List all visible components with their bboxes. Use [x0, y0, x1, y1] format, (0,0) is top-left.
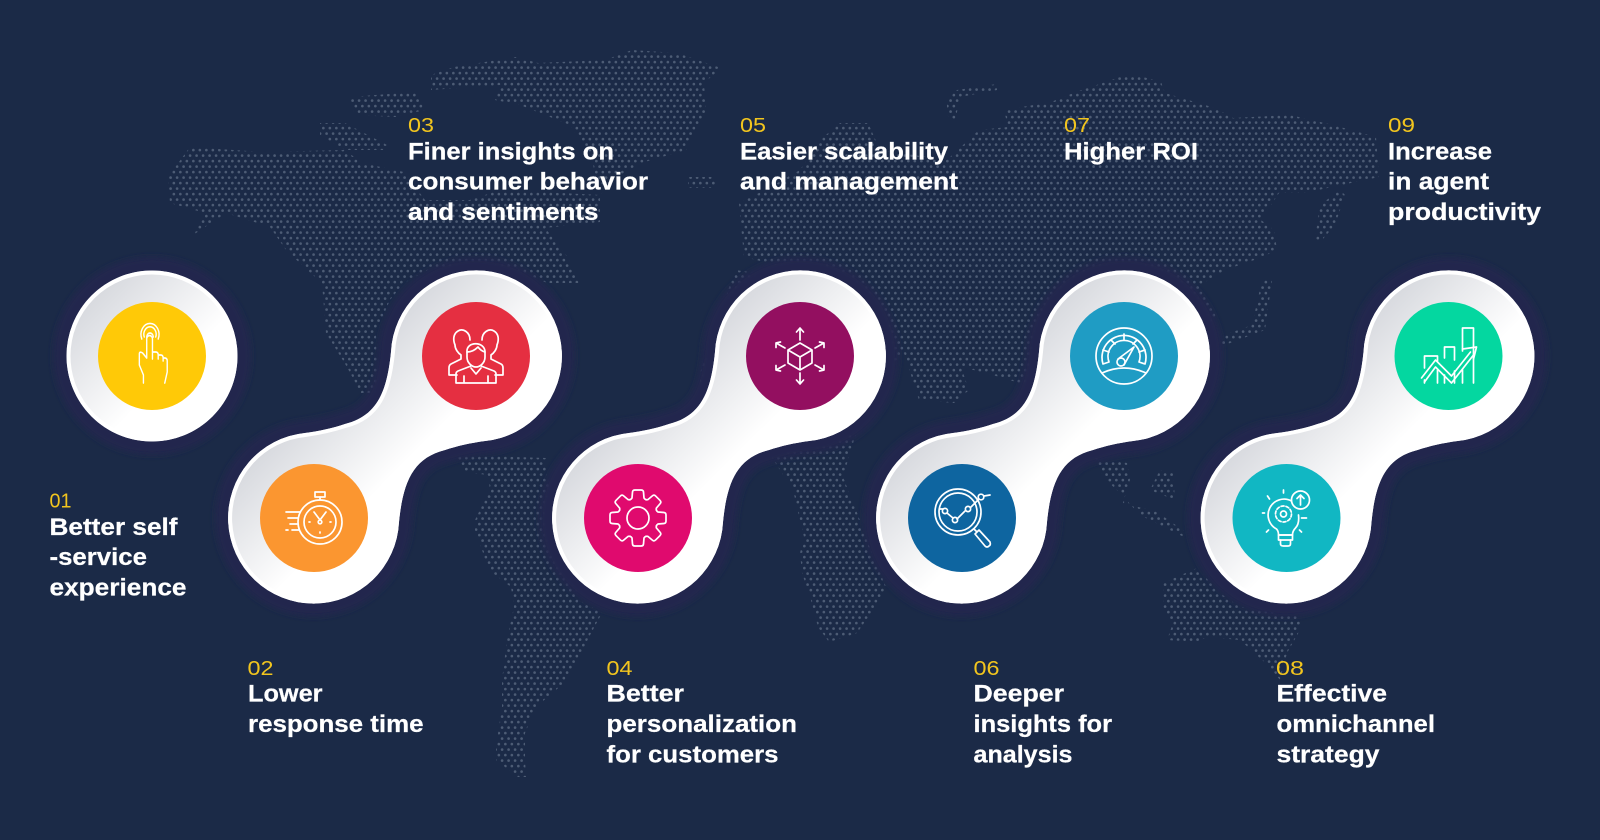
step 9 label: Increase [1388, 138, 1492, 166]
step 8 label [1276, 657, 1435, 768]
step 7 label [1064, 114, 1198, 166]
step 7 label: 07 [1064, 114, 1090, 137]
step 2 label [248, 657, 424, 738]
step 4 label: for customers [606, 742, 778, 768]
step 1 label: 01 [50, 490, 72, 512]
icon: gear on magenta badge [584, 464, 692, 572]
icon: stopwatch on orange badge [260, 464, 368, 572]
step 2 label: Lower [248, 680, 323, 708]
step 2 label: 02 [248, 657, 274, 680]
step 8 label: 08 [1276, 657, 1304, 680]
step 6 label [974, 657, 1112, 768]
step 6 label: Deeper [974, 680, 1064, 708]
step 1 label [50, 490, 186, 602]
step 9 label: productivity [1388, 199, 1541, 226]
step 8 label: Effective [1276, 680, 1387, 708]
step 6 label: analysis [974, 742, 1072, 768]
icon: expanding cube on purple badge [746, 302, 854, 410]
step 1 label: Better self [50, 514, 178, 541]
step 4 label: 04 [606, 657, 632, 680]
step 4 label [606, 657, 797, 768]
step 2 label: response time [248, 711, 424, 738]
step 1 circle [53, 257, 251, 455]
step 5 label: Easier scalability [740, 138, 948, 166]
icon: tapping hand on yellow badge [98, 302, 206, 410]
step 7 label: Higher ROI [1064, 138, 1198, 166]
connector: steps 2 and 3 [228, 270, 562, 604]
icon: speedometer on sky blue badge [1070, 302, 1178, 410]
icon: team on red badge [422, 302, 530, 410]
icon: growth chart on green badge [1394, 302, 1502, 410]
step 8 label: omnichannel [1276, 711, 1435, 738]
step 4 label: personalization [606, 711, 797, 738]
step 9 label: in agent [1388, 168, 1489, 196]
connector: steps 8 and 9 [1201, 270, 1534, 604]
connector: steps 6 and 7 [876, 270, 1210, 604]
world map [168, 50, 1379, 777]
step 9 label [1388, 114, 1541, 226]
step 3 label [408, 114, 648, 226]
icon: light bulb with gear on teal badge [1232, 464, 1340, 572]
step 5 label: and management [740, 168, 958, 196]
step 5 label [740, 114, 958, 196]
step 3 label: Finer insights on [408, 138, 614, 166]
icon: magnifier with graph on blue badge [908, 464, 1016, 572]
step 3 label: 03 [408, 114, 434, 137]
step 5 label: 05 [740, 114, 766, 137]
step 8 label: strategy [1276, 742, 1380, 768]
step 4 label: Better [606, 680, 685, 708]
step 3 label: consumer behavior [408, 168, 648, 196]
step 3 label: and sentiments [408, 199, 598, 226]
step 9 label: 09 [1388, 114, 1415, 137]
connector: steps 4 and 5 [552, 270, 886, 604]
step 6 label: 06 [974, 657, 1000, 680]
step 6 label: insights for [974, 711, 1112, 738]
step 1 label: experience [50, 574, 186, 602]
step 1 label: -service [50, 544, 147, 571]
